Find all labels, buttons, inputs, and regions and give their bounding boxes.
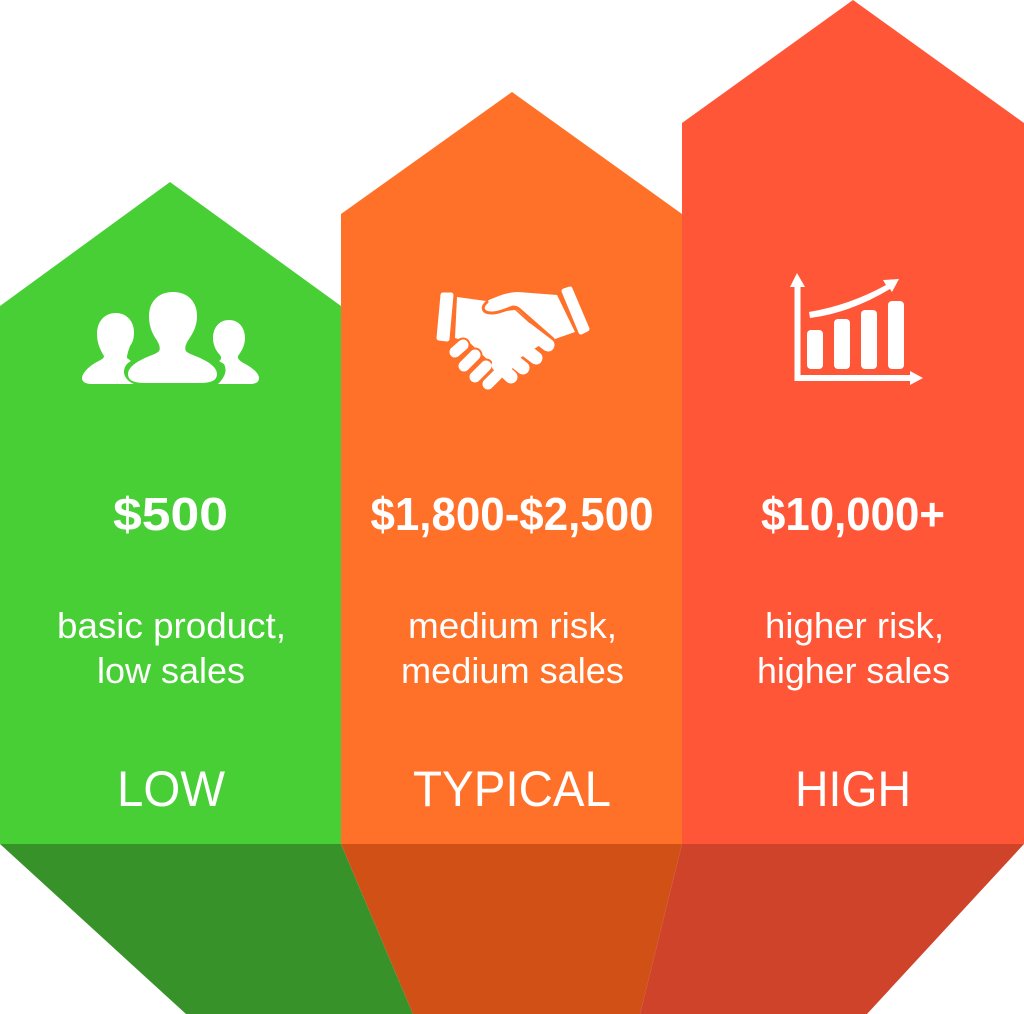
panel: high: [640, 0, 1024, 1014]
description: basic product,: [57, 605, 286, 646]
red base shadow: [640, 844, 1024, 1014]
price: $500: [113, 488, 228, 540]
description: low sales: [97, 650, 245, 691]
green base shadow: [0, 844, 413, 1014]
red arrow body: [682, 0, 1024, 844]
price: $10,000+: [761, 488, 945, 540]
tier label: LOW: [117, 761, 226, 817]
panel: typical: [341, 92, 682, 1014]
tier label: TYPICAL: [413, 761, 611, 817]
description: medium sales: [401, 650, 624, 691]
description: [57, 605, 286, 691]
green arrow body: [0, 182, 341, 844]
description: [401, 605, 624, 691]
description: higher sales: [757, 650, 950, 691]
price: $1,800-$2,500: [370, 488, 654, 540]
description: higher risk,: [765, 605, 944, 646]
description: medium risk,: [408, 605, 617, 646]
orange arrow body: [341, 92, 682, 844]
orange base shadow: [341, 844, 682, 1014]
panel: low: [0, 182, 413, 1014]
icon: handshake: [439, 289, 587, 384]
icon: growth bar chart: [790, 273, 923, 385]
icon: three people: [82, 292, 259, 384]
description: [757, 605, 950, 691]
tier label: HIGH: [795, 761, 911, 817]
